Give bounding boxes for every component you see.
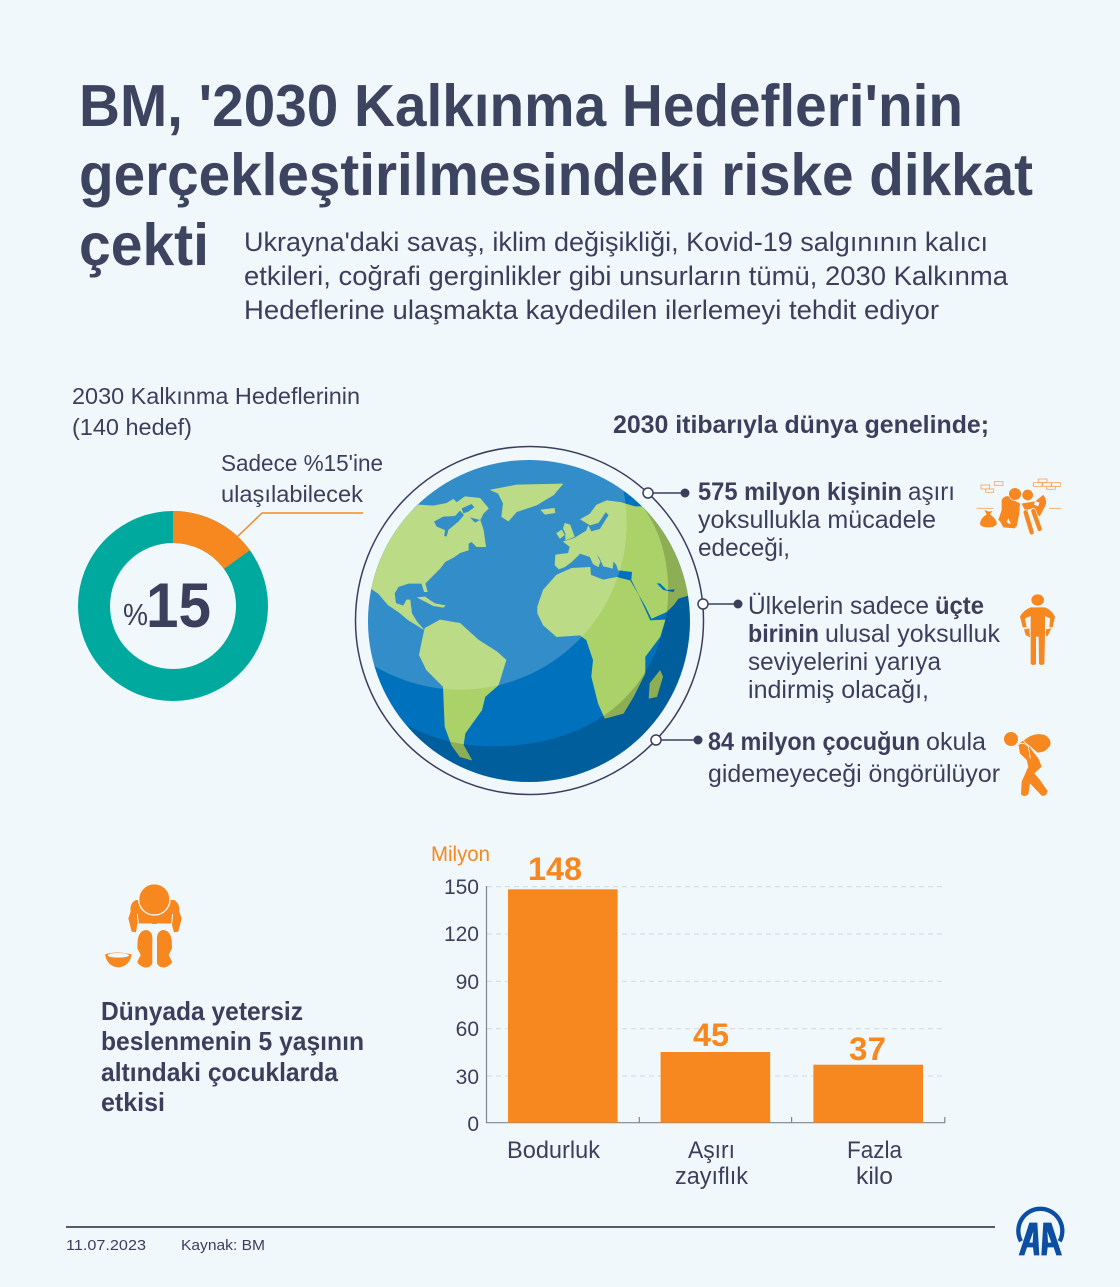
donut chart: 15 percent: 15 bbox=[146, 571, 211, 641]
dark limb shadow bbox=[406, 508, 690, 782]
donut callout label: ulaşılabilecek bbox=[221, 481, 363, 507]
icon: hungry child with bowl bbox=[105, 884, 182, 967]
text: malnutrition heading: Dünyada yetersiz bbox=[101, 996, 303, 1026]
category labels: Fazla bbox=[847, 1137, 903, 1164]
connector 2 bbox=[698, 599, 742, 609]
icon: people in poverty bbox=[977, 479, 1061, 532]
donut panel heading: 2030 Kalkınma Hedeflerinin bbox=[72, 383, 360, 409]
text: 84 million children: 84 milyon çocuğun bbox=[708, 728, 920, 756]
y-axis labels: 150 bbox=[444, 876, 479, 899]
text: malnutrition heading: etkisi bbox=[101, 1087, 165, 1117]
footer: Kaynak: BM bbox=[181, 1238, 265, 1254]
text: 575 million people: yoksullukla mücadele bbox=[698, 506, 936, 534]
text: malnutrition heading: beslenmenin 5 yaşının bbox=[101, 1026, 364, 1056]
text: 575 million people bbox=[698, 478, 955, 562]
heading: worldwide in 2030: 2030 itibarıyla dünya genelinde; bbox=[613, 411, 989, 439]
bar values: 45 bbox=[693, 1017, 729, 1053]
subtitle: Hedeflerine ulaşmakta kaydedilen ilerlemeyi tehdit ediyor bbox=[244, 295, 939, 325]
bar chart bbox=[431, 842, 945, 1190]
text: 575 million people: edeceği, bbox=[698, 534, 790, 562]
subtitle: etkileri, coğrafi gerginlikler gibi unsurların tümü, 2030 Kalkınma bbox=[244, 261, 1009, 291]
greenland, south america, madagascar bbox=[419, 484, 665, 760]
bar values bbox=[528, 851, 886, 1067]
text: one third of countries bbox=[748, 592, 1000, 704]
text: 84 million children bbox=[708, 728, 1000, 788]
north america bbox=[368, 497, 488, 629]
title: gerçekleştirilmesindeki riske dikkat bbox=[79, 142, 1033, 208]
eurasia bbox=[541, 501, 695, 618]
light overlay bbox=[368, 460, 627, 690]
category labels bbox=[507, 1137, 903, 1190]
globe illustration bbox=[354, 446, 704, 796]
y-axis labels bbox=[444, 876, 479, 1136]
y-axis labels: 120 bbox=[444, 923, 479, 946]
text: malnutrition heading: altındaki çocuklarda bbox=[101, 1057, 339, 1087]
footer: 11.07.2023 bbox=[66, 1238, 146, 1254]
footer bbox=[66, 1227, 995, 1254]
gridlines and axes bbox=[486, 886, 945, 1123]
donut chart: 15 percent bbox=[94, 511, 363, 685]
donut chart: 15 percent: % bbox=[123, 597, 148, 632]
y-axis labels: 90 bbox=[456, 971, 479, 994]
text: 84 million children: okula bbox=[926, 728, 986, 756]
text: 84 million children: gidemeyeceği öngörülüyor bbox=[708, 760, 1000, 788]
text: one third of countries: üçte bbox=[935, 592, 984, 620]
text: one third of countries: indirmiş olacağı, bbox=[748, 676, 929, 704]
category labels: kilo bbox=[856, 1163, 893, 1190]
text: one third of countries: Ülkelerin sadece bbox=[748, 592, 929, 620]
bars bbox=[508, 889, 923, 1123]
text: 575 million people: 575 milyon kişinin bbox=[698, 478, 902, 506]
donut panel heading: (140 hedef) bbox=[72, 414, 192, 440]
category labels: Aşırı bbox=[688, 1137, 735, 1164]
title: BM, '2030 Kalkınma Hedefleri'nin bbox=[79, 73, 963, 139]
icon: man with empty pockets bbox=[1020, 594, 1055, 665]
category labels: Bodurluk bbox=[507, 1137, 601, 1164]
title bbox=[79, 73, 1033, 278]
donut callout label bbox=[221, 450, 383, 507]
bar values: 37 bbox=[849, 1031, 886, 1067]
text: 575 million people: aşırı bbox=[908, 478, 955, 506]
connector 1 bbox=[643, 488, 690, 498]
bar values: 148 bbox=[528, 851, 582, 887]
text: one third of countries: ulusal yoksulluk bbox=[825, 620, 1000, 648]
subtitle: Ukrayna'daki savaş, iklim değişikliği, Kovid-19 salgınının kalıcı bbox=[244, 227, 988, 257]
y-axis labels: 0 bbox=[467, 1113, 479, 1136]
donut panel heading bbox=[72, 383, 360, 440]
icon: child carrying a sack bbox=[1004, 732, 1051, 796]
logo: AA bbox=[1018, 1209, 1062, 1255]
donut callout label: Sadece %15'ine bbox=[221, 450, 383, 476]
text: malnutrition heading bbox=[101, 996, 364, 1117]
unit label: Milyon bbox=[431, 842, 490, 866]
y-axis labels: 30 bbox=[456, 1066, 479, 1089]
subtitle bbox=[244, 227, 1009, 325]
text: one third of countries: birinin bbox=[748, 620, 819, 648]
y-axis labels: 60 bbox=[456, 1018, 479, 1041]
category labels: zayıflık bbox=[675, 1163, 749, 1190]
title: çekti bbox=[79, 212, 209, 278]
connector 3 bbox=[651, 735, 702, 745]
text: one third of countries: seviyelerini yarıya bbox=[748, 648, 941, 676]
